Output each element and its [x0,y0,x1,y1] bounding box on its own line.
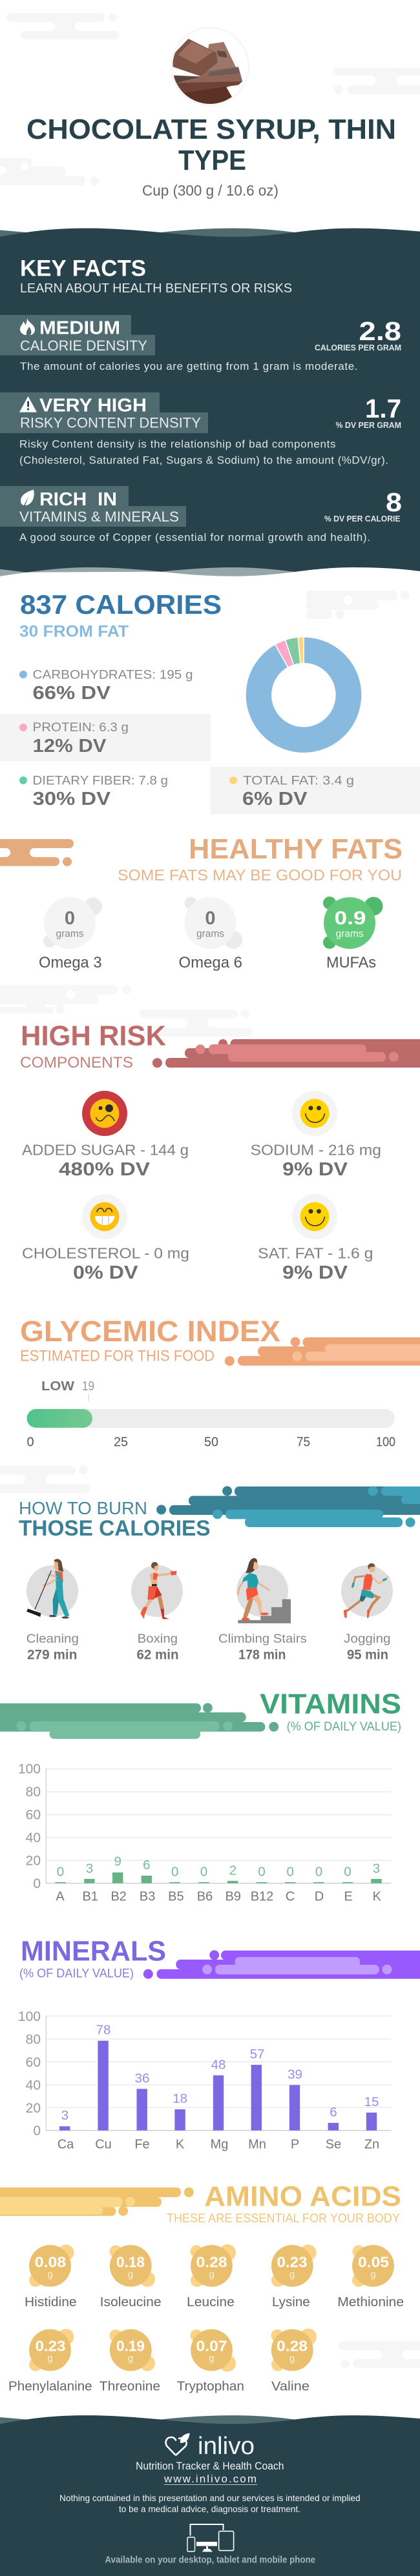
bar chart: minerals: Fe [134,2137,150,2151]
heading: key facts: KEY FACTS [20,256,146,281]
amino: methionine [337,2245,404,2309]
panel: healthy fats [0,834,403,971]
amino: histidine: Histidine [25,2295,77,2309]
gauge scale: 100 [376,1435,395,1450]
stat: mufas: 0.9 [335,908,366,929]
bar chart: vitamins: 0 [258,1865,266,1880]
stat: mufas [323,897,383,971]
bar chart: vitamins [18,1762,391,1903]
icon: person sweeping [26,1559,69,1619]
stat: omega 6 [178,897,242,971]
heading: amino acids: THESE ARE ESSENTIAL FOR YOUR BODY [167,2211,400,2226]
amino: isoleucine: Isoleucine [100,2295,162,2309]
fact: calorie density: The amount of calories you are getting from 1 gram is moderate. [20,360,358,372]
bar chart: minerals: 48 [211,2057,226,2072]
activity: boxing: Boxing [138,1632,178,1646]
heading: high risk: COMPONENTS [20,1054,133,1071]
disclaimer: Nothing contained in this presentation and our services is intended or implied [59,2493,361,2503]
risk: cholesterol [22,1194,189,1283]
heading: minerals: (% OF DAILY VALUE) [19,1966,134,1980]
panel: high risk [20,1020,420,1283]
stat: mufas: MUFAs [326,954,376,971]
amino: methionine: g [370,2269,376,2280]
bar chart: minerals: 40 [26,2078,41,2093]
decorative bars: burn [156,1486,420,1527]
serving size: Cup (300 g / 10.6 oz) [142,182,278,199]
donut chart [246,637,362,753]
activity: jogging: Jogging [344,1632,390,1646]
legend: total fat: TOTAL FAT: 3.4 g [243,774,354,788]
stat: omega 6: 0 [205,908,216,929]
gauge label: LOW [41,1379,75,1394]
icon: leaf [21,490,34,505]
amino: leucine: g [209,2269,215,2280]
bar chart: minerals: 80 [26,2032,41,2047]
disclaimer: to be a medical advice, diagnosis or treatment. [119,2504,300,2514]
bar chart: minerals: 20 [26,2101,41,2116]
heading: minerals: MINERALS [21,1936,166,1967]
bar chart: vitamins: K [373,1889,382,1903]
amino: phenylalanine: g [47,2353,53,2364]
stat: omega 6: grams [196,929,224,940]
fact: vitamins and minerals: % DV PER CALORIE [324,514,401,523]
icon: person on stairs [238,1558,291,1623]
amino: phenylalanine: 0.23 [35,2338,66,2355]
bar chart: vitamins: 0 [33,1876,41,1891]
decorative bars: minerals [143,1951,420,1979]
fact: vitamins and minerals: RICH IN [39,489,117,510]
heading: key facts [20,256,292,296]
bar chart: vitamins: 3 [373,1861,380,1876]
gauge scale: 0 [27,1435,34,1450]
bar chart: vitamins: 6 [143,1858,151,1872]
decorative bars: amino acids [0,2187,194,2216]
stat: omega 3: Omega 3 [39,954,102,971]
bar chart: minerals: Cu [95,2137,112,2151]
activity: climbing stairs: Climbing Stairs [218,1632,307,1646]
bar chart: vitamins: 60 [26,1807,41,1823]
bar chart: vitamins: 0 [200,1865,207,1880]
bar chart: vitamins: B6 [197,1889,213,1903]
logo: inlivo [166,2433,255,2460]
icon: smiley [300,1202,330,1232]
amino: tryptophan: Tryptophan [177,2379,244,2393]
activity: boxing: 62 min [137,1648,178,1663]
bar chart: vitamins: B12 [251,1889,273,1903]
bar chart: minerals: K [176,2137,185,2151]
heading: healthy fats [118,834,403,884]
heading: glycemic index: ESTIMATED FOR THIS FOOD [20,1348,215,1365]
amino: threonine [100,2329,160,2393]
heading: how to burn: HOW TO BURN [19,1498,147,1518]
bar chart: vitamins: 100 [18,1762,41,1776]
fact: calorie density: 2.8 [359,316,401,346]
legend: protein [0,714,211,761]
amino: lysine [271,2245,317,2309]
risk: added sugar [22,1091,189,1180]
heading: high risk [20,1020,167,1071]
bar chart: vitamins: 80 [26,1785,41,1800]
bar chart: minerals: 57 [250,2047,264,2062]
bar chart: minerals: P [291,2137,299,2151]
panel: minerals [18,1936,420,2151]
activity: jogging [341,1563,393,1663]
amino: lysine: g [289,2269,295,2280]
legend: carbohydrates [19,668,193,704]
panel: amino acids [0,2182,420,2393]
decorative bars: healthy fats [0,839,81,866]
bar chart: vitamins: C [286,1889,295,1903]
bar chart: minerals: Mn [248,2137,266,2151]
bar chart: minerals: 36 [135,2071,149,2085]
amino: histidine: g [47,2269,53,2280]
risk: sodium: 9% DV [282,1159,348,1180]
bar chart: minerals: 78 [96,2023,110,2038]
bar chart: minerals: Mg [211,2137,228,2151]
amino: leucine: Leucine [187,2295,235,2309]
bar chart: vitamins: B2 [110,1889,127,1903]
fact: calorie density: CALORIES PER GRAM [315,343,401,352]
icon: warning triangle [19,396,37,412]
icon: devices [187,2524,234,2552]
fact: risky content density: 1.7 [365,394,401,423]
amino: histidine: 0.08 [35,2254,66,2271]
logo: inlivo: inlivo [198,2433,255,2460]
activity: cleaning: Cleaning [26,1632,79,1646]
amino: isoleucine: 0.18 [116,2254,145,2271]
availability note: Available on your desktop, tablet and mobile phone [105,2555,315,2566]
risk: saturated fat [258,1194,373,1283]
gauge scale: 25 [114,1435,128,1450]
amino: leucine: 0.28 [196,2254,227,2271]
panel: vitamins [0,1689,401,1903]
gauge bar [27,1409,395,1428]
stat: omega 3: grams [56,929,84,940]
amino: valine: Valine [271,2379,310,2393]
amino: lysine: 0.23 [277,2254,308,2271]
decorative bars: vitamins [0,1703,278,1739]
bar chart: minerals: 100 [18,2009,41,2024]
fact: calorie density: CALORIE DENSITY [20,338,147,354]
bar chart: vitamins: 0 [171,1865,178,1880]
fact: calorie density [0,315,401,372]
heading: vitamins [260,1689,401,1734]
gauge scale: 50 [204,1435,218,1450]
gauge scale: 75 [297,1435,310,1450]
amino: isoleucine [100,2245,162,2309]
risk: added sugar: 480% DV [59,1159,151,1180]
panel: calories [0,589,420,815]
risk: added sugar: ADDED SUGAR - 144 g [22,1141,189,1158]
fact: vitamins and minerals [0,486,402,543]
stat: omega 3: 0 [65,908,75,929]
legend: dietary fiber: 30% DV [32,789,111,809]
bar chart: vitamins: B3 [140,1889,155,1903]
amino: valine: g [289,2353,295,2364]
risk: sodium [251,1091,381,1180]
legend: dietary fiber: DIETARY FIBER: 7.8 g [32,774,168,788]
icon: grinning face [90,1202,119,1232]
bar chart: vitamins: B1 [82,1889,98,1903]
decorative bars: glycemic [225,1337,420,1366]
bar chart: vitamins: 0 [286,1865,294,1880]
fact: risky content density: VERY HIGH [39,395,147,416]
stat: omega 3 [39,897,102,971]
bar chart: vitamins: B5 [168,1889,184,1903]
website link: www.inlivo.com [163,2473,257,2485]
amino: histidine [25,2245,77,2309]
bar chart: minerals: 39 [288,2067,302,2082]
amino: methionine: 0.05 [358,2254,389,2271]
amino: leucine [187,2244,236,2309]
header section [0,13,420,199]
activity: climbing stairs [218,1558,307,1663]
fact: calorie density: MEDIUM [39,318,120,338]
amino: isoleucine: g [128,2269,133,2280]
bar chart: minerals: 6 [330,2105,337,2120]
panel: glycemic index [20,1315,420,1450]
bar chart: minerals: Ca [58,2137,74,2151]
amino: phenylalanine [8,2329,92,2393]
bar chart: minerals: 60 [26,2055,41,2070]
legend: carbohydrates: 66% DV [32,683,111,704]
heading: minerals [19,1936,166,1980]
heading: how to burn: THOSE CALORIES [19,1516,211,1541]
panel: key facts [0,228,420,576]
icon: boxer [140,1562,176,1619]
bar chart: vitamins: 9 [114,1854,121,1869]
fact: risky content density: (Cholesterol, Saturated Fat, Sugars & Sodium) to the amount (%DV/gr). [19,454,388,467]
fact: risky content density: Risky Content density is the relationship of bad components [19,438,336,451]
legend: protein: 12% DV [32,736,107,756]
title: CHOCOLATE SYRUP, THIN [26,114,396,145]
heading: calories [19,589,222,641]
title: TYPE [178,145,246,176]
heading: healthy fats: SOME FATS MAY BE GOOD FOR YOU [118,867,402,884]
bar chart: vitamins: A [56,1889,65,1903]
decorative bars: high risk [152,1039,420,1068]
tagline: Nutrition Tracker & Health Coach [136,2460,284,2472]
risk: saturated fat: 9% DV [282,1263,348,1283]
icon: sick face [90,1099,119,1128]
bar chart: vitamins: 3 [86,1861,93,1876]
panel: how to burn [19,1486,420,1663]
activity: jogging: 95 min [347,1648,388,1663]
amino: phenylalanine: Phenylalanine [8,2379,92,2393]
heading: calories: 837 CALORIES [20,589,222,620]
heading: key facts: LEARN ABOUT HEALTH BENEFITS OR RISKS [20,281,292,296]
heading: amino acids [167,2182,401,2226]
risk: cholesterol: CHOLESTEROL - 0 mg [22,1244,189,1261]
activity: boxing [131,1562,183,1663]
amino: tryptophan: g [209,2353,215,2364]
bar chart: vitamins: 0 [57,1865,64,1880]
heading: glycemic index: GLYCEMIC INDEX [20,1315,280,1348]
amino: valine [271,2329,317,2393]
gauge scale [27,1435,395,1450]
fact: vitamins and minerals: 8 [386,487,402,517]
icon: smiley [300,1099,330,1128]
risk: saturated fat: SAT. FAT - 1.6 g [258,1244,373,1261]
bar chart: minerals: 18 [173,2091,187,2106]
amino: methionine: Methionine [337,2295,404,2309]
bar chart: vitamins: 0 [315,1865,322,1880]
bar chart: minerals: 0 [33,2124,41,2138]
heading: vitamins: VITAMINS [260,1689,401,1719]
amino: threonine: Threonine [100,2379,160,2393]
legend: carbohydrates: CARBOHYDRATES: 195 g [32,668,193,682]
heading: glycemic index [20,1315,280,1365]
bar chart: minerals: Zn [364,2137,379,2151]
heading: high risk: HIGH RISK [21,1020,167,1051]
activity: climbing stairs: 178 min [238,1648,286,1663]
icon: runner [344,1563,389,1618]
gauge label [41,1379,94,1401]
heading: calories: 30 FROM FAT [19,623,129,641]
legend: total fat [211,767,420,815]
bar chart: vitamins: 2 [229,1863,236,1878]
legend: total fat: 6% DV [242,789,308,809]
amino: lysine: Lysine [272,2295,310,2309]
risk: cholesterol: 0% DV [73,1263,138,1283]
heading: vitamins: (% OF DAILY VALUE) [287,1719,401,1734]
activity: cleaning: 279 min [27,1648,77,1663]
stat: omega 6: Omega 6 [178,954,242,971]
disclaimer [59,2493,361,2514]
bar chart: vitamins: E [344,1889,353,1903]
bar chart: minerals: 15 [364,2094,379,2109]
fact: risky content density: RISKY CONTENT DENSITY [20,414,201,431]
fact: risky content density [0,392,401,467]
food image [171,28,249,106]
fact: vitamins and minerals: VITAMINS & MINERALS [19,509,179,525]
stat: mufas: grams [335,929,364,940]
heading: amino acids: AMINO ACIDS [204,2182,401,2213]
title [26,114,396,176]
bar chart: vitamins: D [315,1889,324,1903]
heading: healthy fats: HEALTHY FATS [189,834,403,865]
fact: vitamins and minerals: A good source of Copper (essential for normal growth and health). [19,531,370,543]
amino: threonine: g [128,2353,133,2364]
legend: protein: PROTEIN: 6.3 g [32,720,129,735]
bar chart: vitamins: 0 [344,1865,352,1880]
heading: how to burn [19,1498,211,1541]
bar chart: minerals [18,2009,391,2151]
footer [0,2415,420,2576]
legend: dietary fiber [19,774,168,809]
amino: tryptophan: 0.07 [196,2338,227,2355]
bar chart: vitamins: B9 [225,1889,241,1903]
gauge label: 19 [82,1379,94,1394]
bar chart: minerals: Se [326,2137,341,2151]
bar chart: vitamins: 40 [26,1831,41,1845]
activity: cleaning [26,1559,79,1663]
amino: tryptophan [177,2329,244,2393]
fact: risky content density: % DV PER GRAM [336,420,401,430]
amino: threonine: 0.19 [116,2338,145,2355]
amino: valine: 0.28 [277,2338,308,2355]
bar chart: vitamins: 20 [26,1854,41,1868]
risk: sodium: SODIUM - 216 mg [251,1141,381,1158]
icon: flame [20,318,35,335]
bar chart: minerals: 3 [61,2108,68,2123]
